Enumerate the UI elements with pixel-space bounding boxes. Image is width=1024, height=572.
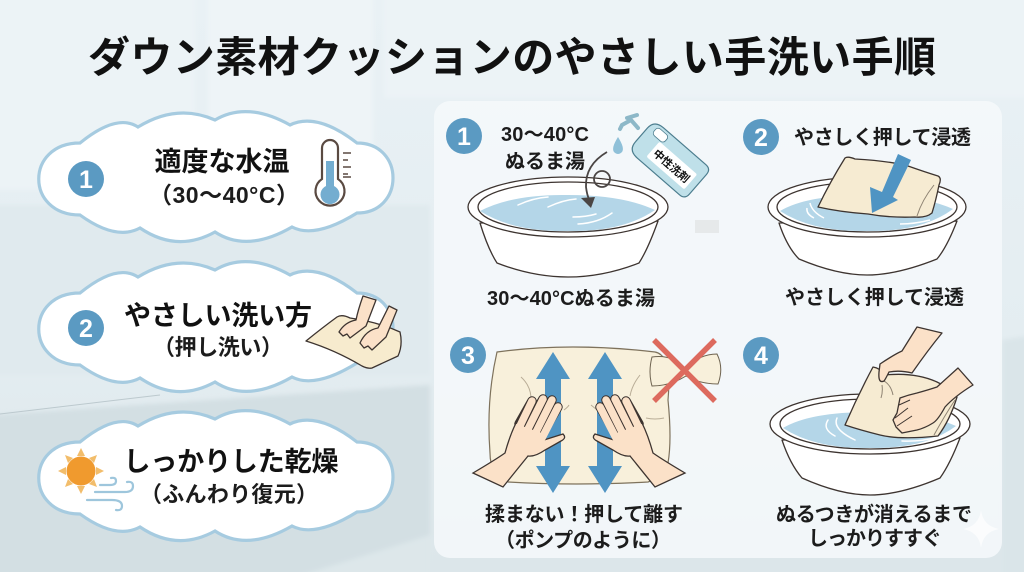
caption: しっかりすすぐ: [808, 527, 942, 550]
subheading: ふんわり復元: （ふんわり復元）: [140, 482, 318, 507]
icon: twisted cushion crossed out: [650, 340, 721, 401]
badge 1: 1: [457, 123, 471, 151]
cushion creases: [521, 375, 664, 419]
badge 4: 4: [754, 342, 768, 370]
caption: [485, 503, 683, 552]
left hand: [473, 399, 565, 487]
arrow: pour into water: [581, 152, 610, 208]
icon: thermometer: [316, 140, 351, 206]
badge 4: [743, 337, 779, 373]
badge 2: 2: [79, 315, 93, 343]
subheading: 押し洗い: （押し洗い）: [153, 335, 283, 360]
lower hand: [893, 368, 973, 433]
caption: [776, 502, 972, 550]
cloud 3: thorough drying: [39, 411, 393, 541]
label: やさしく押して浸透: [794, 126, 971, 149]
icon: detergent bottle: [613, 115, 711, 199]
heading: しっかりした乾燥: しっかりした乾燥: [124, 447, 338, 477]
icon: detergent bottle: 中性洗剤: [650, 146, 693, 186]
panel: left summary clouds: [39, 112, 401, 541]
title: ダウン素材クッションのやさしい手洗い手順: [88, 34, 936, 81]
badge 1: [446, 118, 482, 154]
badge 1: [68, 161, 104, 197]
double arrows: [536, 352, 622, 493]
badge 1: 1: [79, 166, 93, 194]
label: 30〜40℃ ぬるま湯: ぬるま湯: [505, 150, 585, 173]
panel: right step illustrations: [434, 101, 1002, 558]
upper hand: [879, 327, 942, 382]
badge 2: [743, 119, 779, 155]
badge 2: [68, 310, 104, 346]
bowl with cushion: [768, 157, 966, 275]
cushion: [489, 347, 670, 484]
heading: 適度な水温: 適度な水温: [154, 147, 290, 177]
icon: sparkle watermark: [963, 510, 999, 548]
caption: ぬるつきが消えるまで: [776, 502, 972, 526]
cloud 2: gentle wash method: [39, 262, 401, 392]
heading: やさしい洗い方: やさしい洗い方: [124, 301, 312, 331]
caption: 30〜40°Cぬるま湯: [487, 287, 655, 310]
step 4: [743, 327, 973, 550]
caption: 揉まない！押して離す: [485, 503, 683, 526]
caption: （ポンプのように）: [495, 529, 671, 552]
badge 3: [450, 337, 486, 373]
bowl with cushion: [770, 367, 970, 495]
step 2: [743, 119, 971, 309]
arrow: press down: [870, 154, 911, 213]
step 1: [446, 115, 711, 310]
caption: やさしく押して浸透: [785, 286, 964, 309]
right hand: [593, 399, 685, 487]
step 3: [450, 337, 721, 552]
badge 2: 2: [754, 124, 768, 152]
label: 30〜40℃ ぬるま湯: [501, 124, 589, 173]
icon: sun and wind: [58, 448, 133, 510]
icon: hands pressing cushion: [306, 296, 401, 368]
cloud 1: moderate water temperature: [39, 112, 393, 242]
bowl with warm water: [468, 177, 668, 277]
label: 30〜40℃ ぬるま湯: 30〜40°C: [501, 124, 589, 146]
subheading: 30〜40℃: （30〜40°C）: [149, 182, 299, 208]
badge 3: 3: [461, 342, 475, 370]
